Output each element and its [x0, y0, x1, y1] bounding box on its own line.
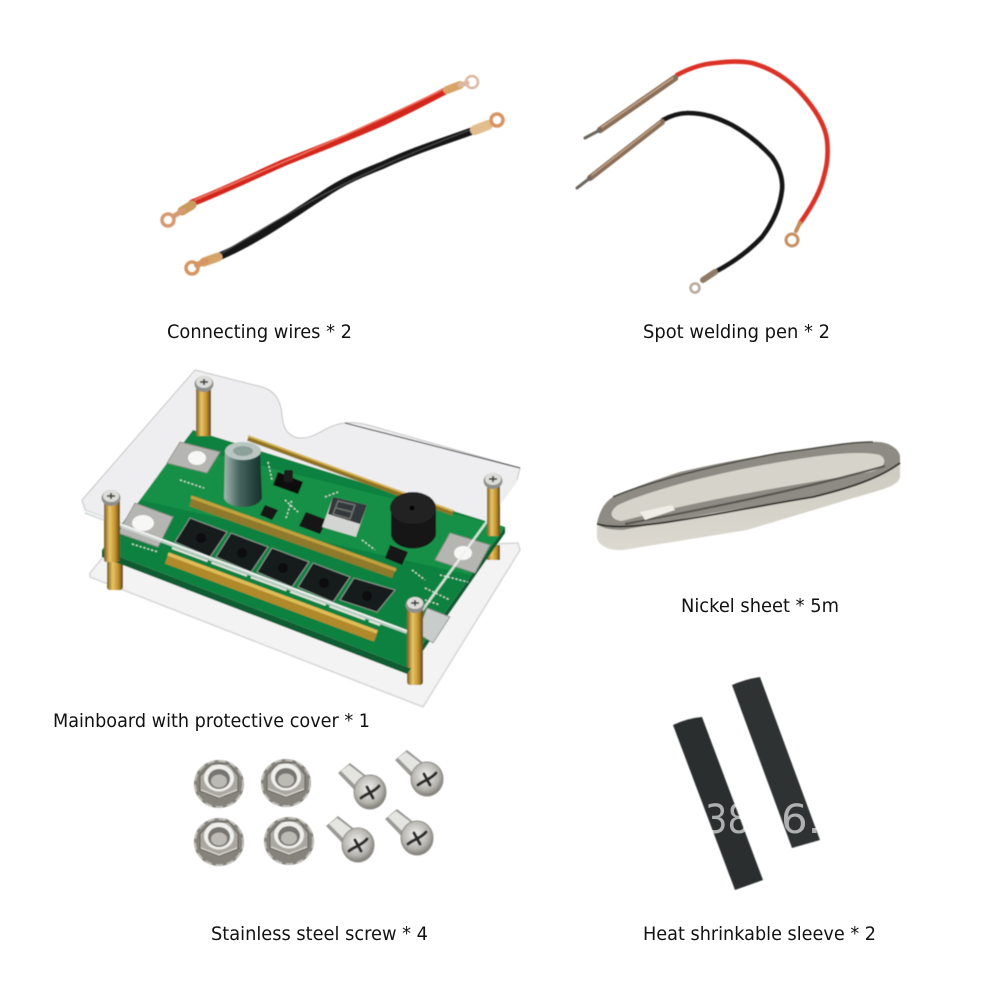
seven-segment display: [322, 497, 367, 537]
label: stainless steel screw: Stainless steel screw * 4: [211, 923, 428, 945]
label: connecting wires: Connecting wires * 2: [167, 321, 352, 343]
middle gold bar: [191, 501, 394, 573]
back gold bar: [248, 438, 453, 513]
top acrylic cover: [82, 370, 520, 630]
label: nickel sheet: Nickel sheet * 5m: [681, 595, 839, 617]
circuit board: [102, 430, 505, 674]
red connecting wire: [162, 76, 478, 226]
stainless screws: [326, 750, 443, 862]
tactile button: [273, 470, 303, 494]
sleeve one: [673, 717, 763, 890]
photo: mainboard with protective cover: [82, 370, 520, 707]
watermark: 6.: [781, 797, 821, 843]
label: heat shrinkable sleeve: Heat shrinkable sleeve * 2: [643, 923, 876, 945]
outer strip body: [597, 442, 900, 550]
photo: heat shrinkable sleeves: [673, 677, 821, 890]
small components: [260, 505, 408, 565]
power transistors: [175, 518, 395, 612]
capacitor: [224, 442, 262, 507]
photo: spot welding pens: [577, 62, 828, 292]
black welding pen: [577, 113, 782, 292]
coil top: [597, 442, 900, 530]
buzzer: [390, 492, 436, 548]
label: spot welding pen: Spot welding pen * 2: [643, 321, 830, 343]
photo: screws and nuts: [194, 750, 443, 866]
control chip: [299, 512, 327, 534]
silver solder pads: [118, 442, 490, 643]
lower standoffs: [107, 545, 500, 685]
photo: nickel sheet: [597, 442, 900, 550]
upper standoffs and screws: [102, 376, 502, 668]
watermark: 38: [705, 797, 750, 843]
sleeve two: [732, 677, 820, 848]
watermark: [705, 797, 821, 843]
front edge of top cover: [85, 480, 517, 632]
flange nuts: [194, 759, 314, 866]
red welding pen: [585, 62, 828, 246]
photo: connecting wires: [162, 76, 503, 274]
bottom acrylic plate: [90, 543, 520, 707]
black connecting wire: [186, 114, 503, 274]
front gold bar: [167, 558, 376, 636]
label: mainboard: Mainboard with protective cover * 1: [53, 710, 370, 732]
